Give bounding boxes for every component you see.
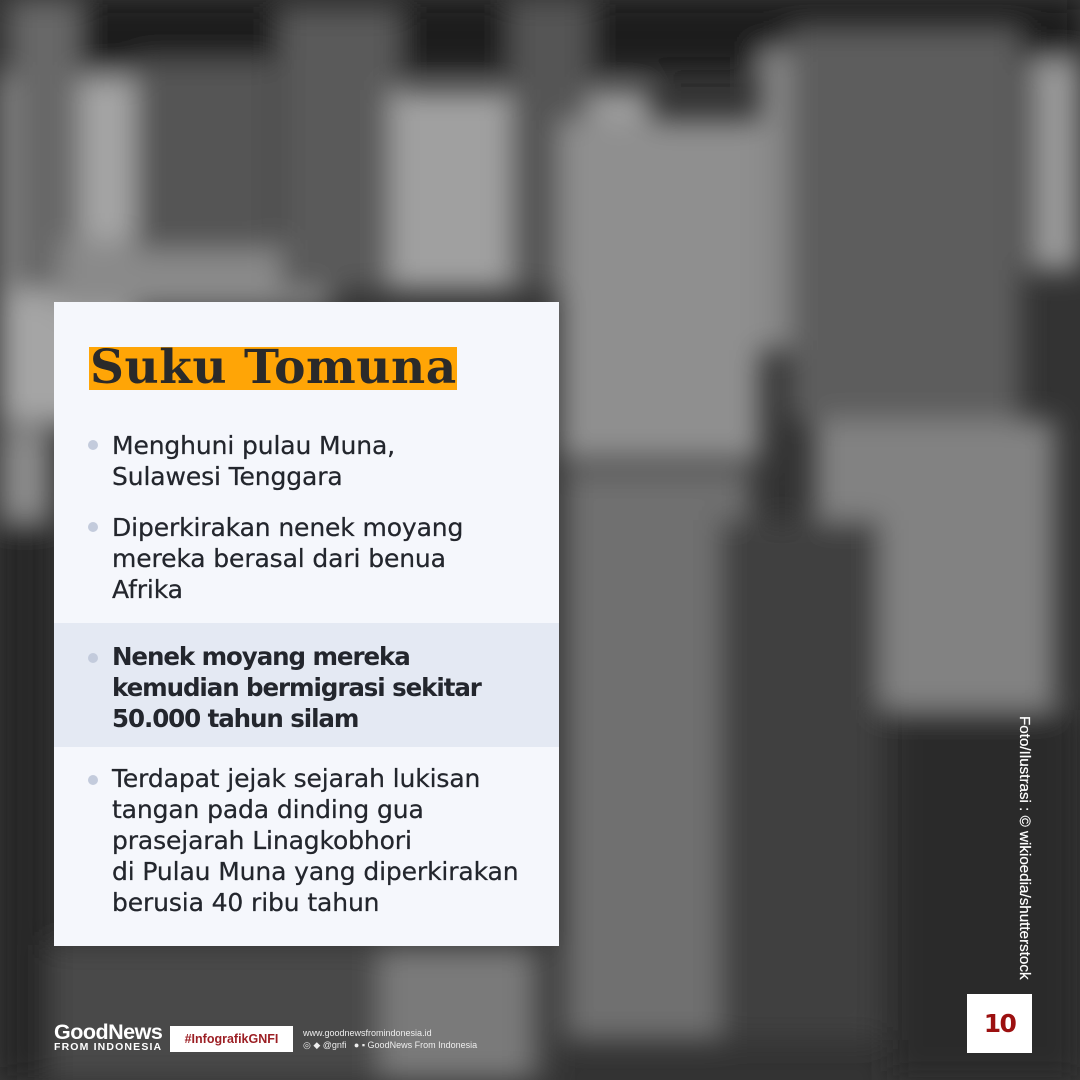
text: origin [112,513,463,604]
title highlight and heading [89,347,457,390]
logo: GoodNews from Indonesia: GoodNews [54,1020,162,1044]
bullet 2 [88,522,98,532]
website and social links [303,1028,478,1050]
text: cave paintings [112,764,518,917]
text: origin: Diperkirakan nenek moyang [112,513,463,542]
website and social links: www.goodnewsfromindonesia.id [303,1028,432,1038]
text: cave paintings: tangan pada dinding gua [112,795,424,824]
text: origin: mereka berasal dari benua [112,544,446,573]
text: migration highlight: Nenek moyang mereka [112,642,410,671]
text: migration highlight [112,642,482,733]
bullet 1 [88,440,98,450]
hashtag badge: #InfografikGNFI [185,1032,278,1046]
page number [967,994,1032,1053]
text: origin: Afrika [112,575,183,604]
hashtag badge [170,1026,293,1052]
bullet 3 [88,653,98,663]
website and social links: ◎ ◆ @gnfi ● ▪ GoodNews From Indonesia [303,1040,477,1050]
text: cave paintings: berusia 40 ribu tahun [112,888,379,917]
text: cave paintings: di Pulau Muna yang diperkirakan [112,857,518,886]
text: habitat: Menghuni pulau Muna, [112,431,395,460]
title: Suku Tomuna [90,340,457,395]
panel: description card [54,302,559,946]
page number: 10 [984,1009,1015,1038]
text: migration highlight: 50.000 tahun silam [112,704,358,733]
bullet 4 [88,775,98,785]
highlighted band [54,623,559,747]
text: migration highlight: kemudian bermigrasi sekitar [112,673,481,702]
photo credit: Foto/Ilustrasi : © wikioedia/shutterstock [1016,716,1033,980]
text: cave paintings: prasejarah Linagkobhori [112,826,412,855]
text: habitat: Sulawesi Tenggara [112,462,343,491]
text: cave paintings: Terdapat jejak sejarah lukisan [112,764,480,793]
text: habitat [112,431,395,491]
logo: GoodNews from Indonesia: FROM INDONESIA [54,1041,162,1053]
